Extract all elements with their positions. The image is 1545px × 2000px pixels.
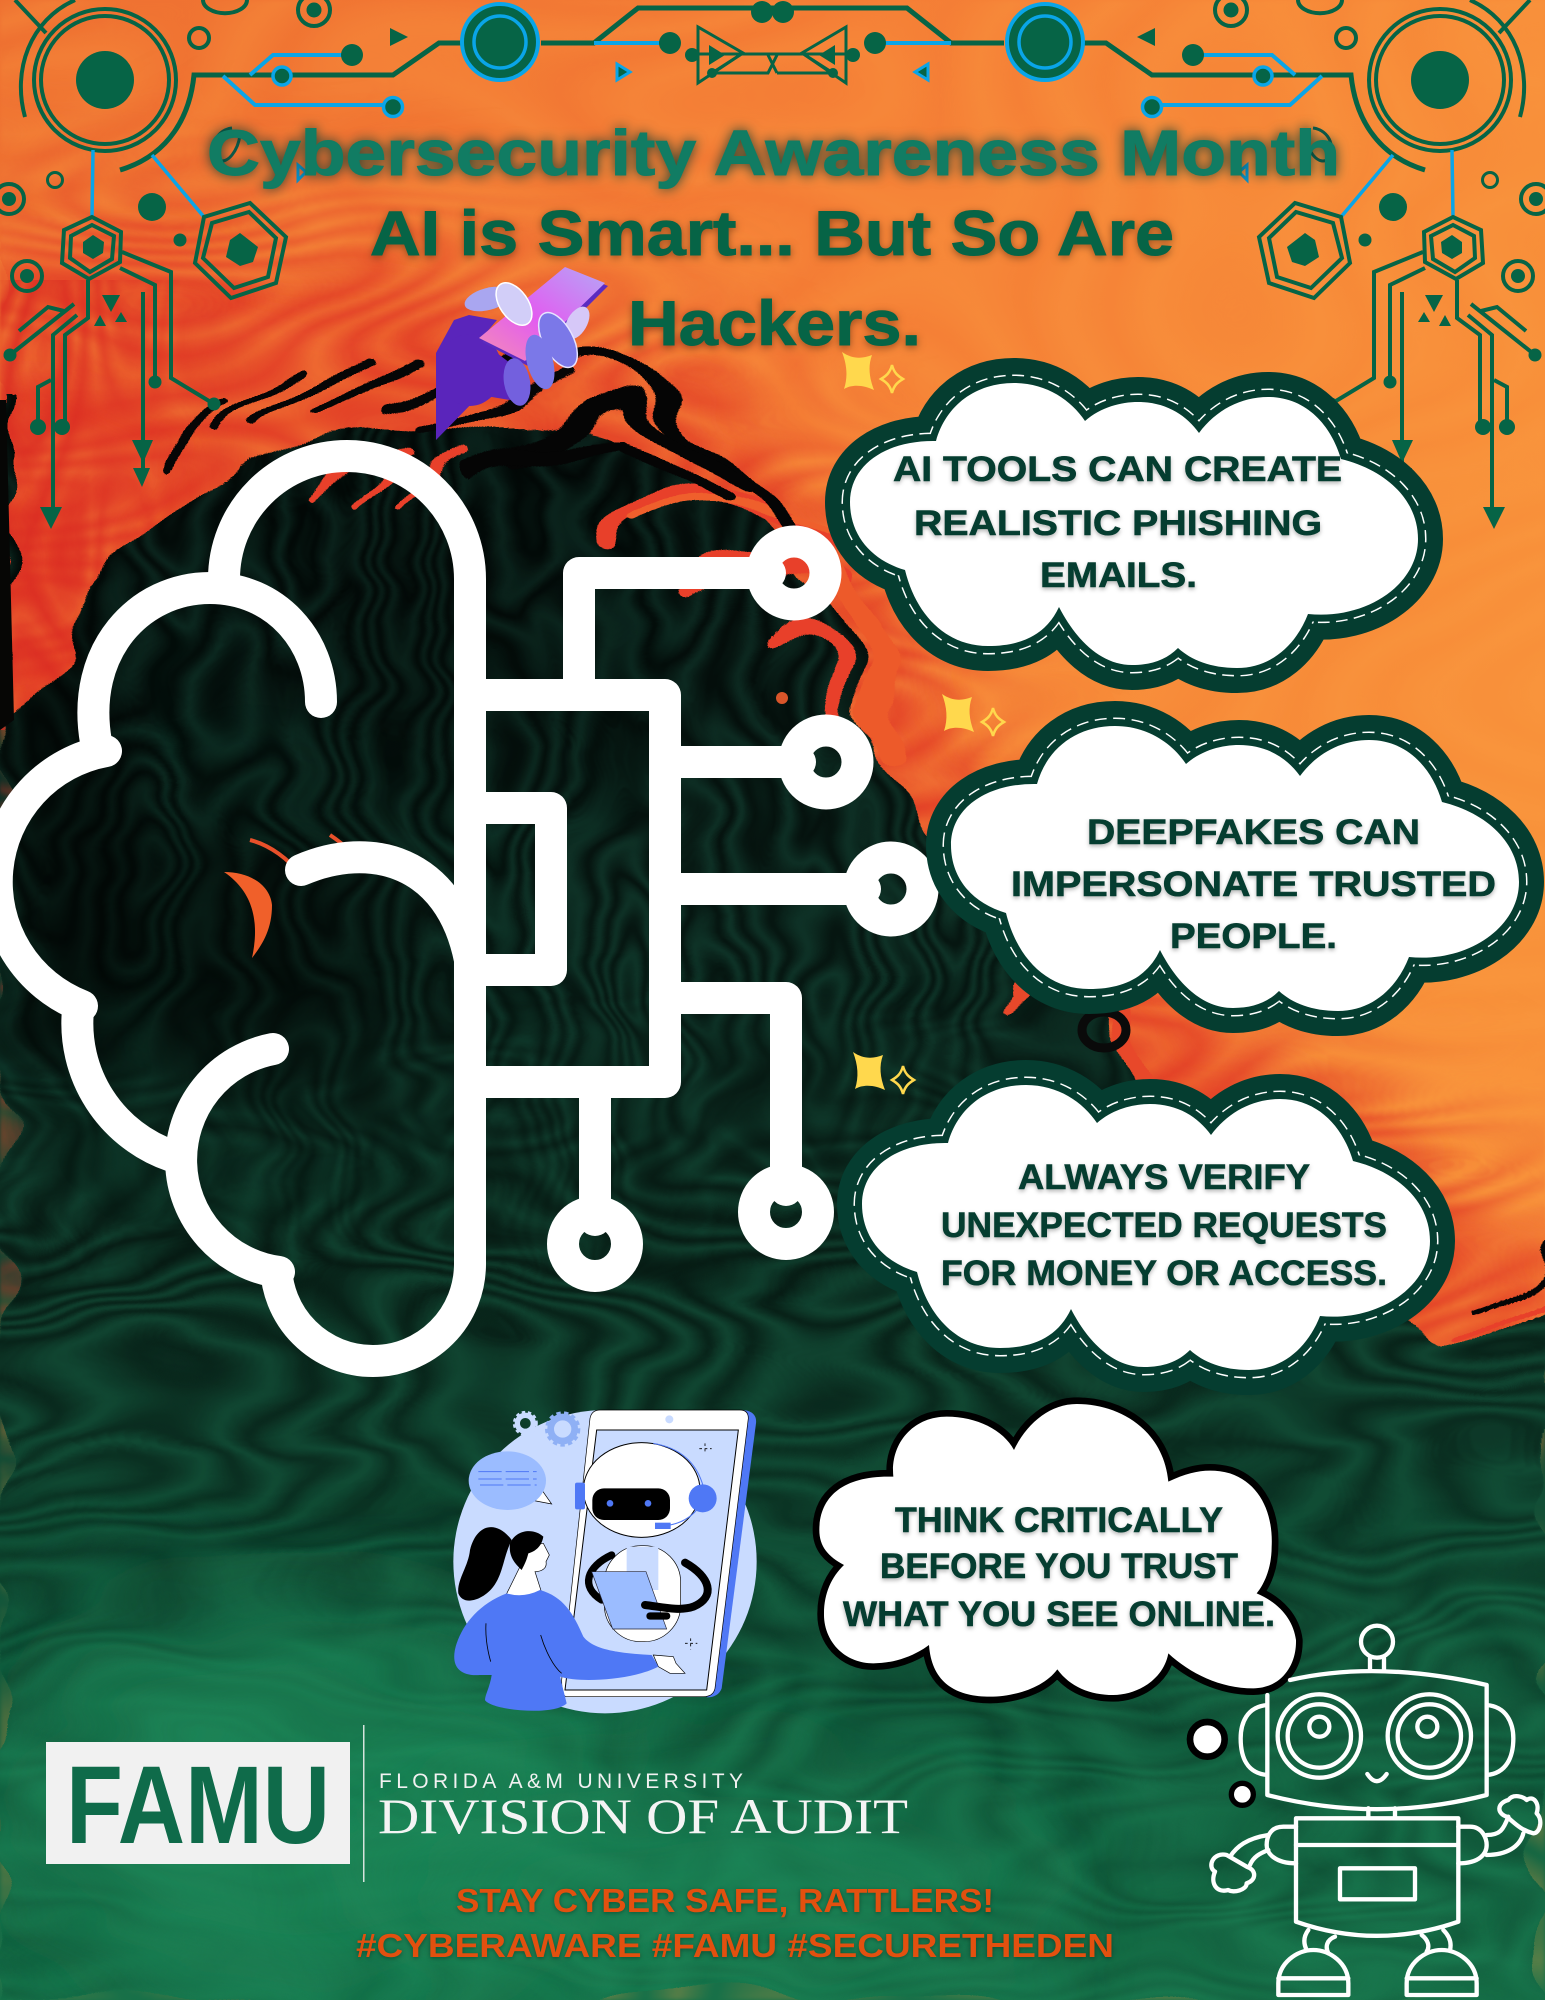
callout: always verify: FOR MONEY OR ACCESS. bbox=[941, 1254, 1387, 1293]
callout: always verify: UNEXPECTED REQUESTS bbox=[941, 1206, 1387, 1245]
callout: think critically: WHAT YOU SEE ONLINE. bbox=[843, 1595, 1275, 1634]
callout: deepfakes: IMPERSONATE TRUSTED bbox=[1011, 865, 1496, 904]
title line 1: Cybersecurity Awareness Month bbox=[207, 117, 1340, 189]
circuit decoration: left bbox=[0, 0, 630, 529]
icon: robot hand holding phone bbox=[436, 267, 608, 440]
callout: think critically bbox=[819, 1404, 1296, 1697]
icon: robot outline with thought bubbles bbox=[1190, 1626, 1540, 1995]
callout: think critically: THINK CRITICALLY bbox=[895, 1501, 1223, 1540]
callout: deepfakes bbox=[951, 726, 1519, 1011]
callout: always verify bbox=[862, 1085, 1430, 1370]
logo divider and division name: DIVISION OF AUDIT bbox=[378, 1788, 908, 1844]
callout: AI tools: EMAILS. bbox=[1040, 556, 1197, 595]
callout: think critically: BEFORE YOU TRUST bbox=[880, 1547, 1238, 1586]
title line 2: AI is Smart... But So Are bbox=[370, 199, 1174, 269]
logo divider and division name bbox=[363, 1725, 908, 1882]
circuit decoration: top centre bbox=[462, 1, 1083, 83]
callout: AI tools: REALISTIC PHISHING bbox=[914, 504, 1322, 543]
logo: FAMU: FAMU bbox=[66, 1744, 330, 1867]
callout: AI tools: AI TOOLS CAN CREATE bbox=[893, 450, 1342, 489]
callout: deepfakes: DEEPFAKES CAN bbox=[1087, 813, 1420, 852]
title bbox=[207, 117, 1340, 359]
title line 3: Hackers. bbox=[628, 289, 921, 359]
callout: always verify: ALWAYS VERIFY bbox=[1018, 1158, 1310, 1197]
sparkles: cloud 1 bbox=[842, 352, 903, 393]
closing message bbox=[356, 1882, 1114, 1964]
callout: AI tools bbox=[850, 383, 1418, 668]
illustration: woman and chatbot on tablet bbox=[453, 1410, 757, 1713]
logo divider and division name: FLORIDA A&M UNIVERSITY bbox=[379, 1770, 743, 1793]
closing message: #CYBERAWARE #FAMU #SECURETHEDEN bbox=[356, 1927, 1114, 1964]
icon: brain circuit bbox=[0, 456, 922, 1361]
sparkles: cloud 2 bbox=[942, 694, 1004, 736]
circuit decoration: right (mirror) bbox=[915, 0, 1545, 529]
sparkles: cloud 3 bbox=[853, 1052, 914, 1094]
closing message: STAY CYBER SAFE, RATTLERS! bbox=[456, 1882, 994, 1919]
callout: deepfakes: PEOPLE. bbox=[1170, 917, 1337, 956]
